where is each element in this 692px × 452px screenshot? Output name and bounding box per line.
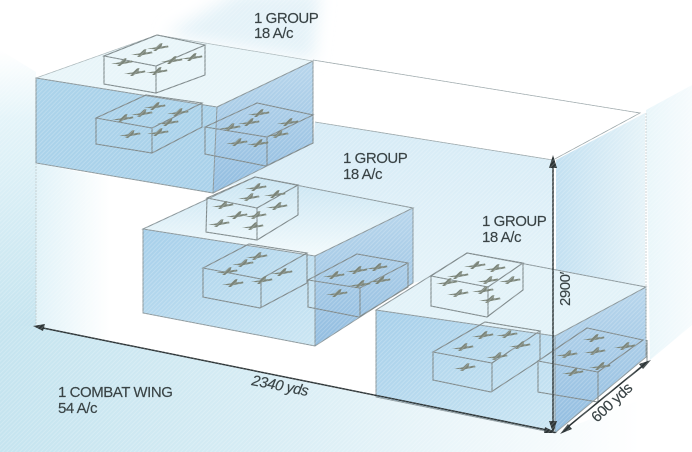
label: 2900 feet: 2900′: [557, 271, 574, 306]
label: top group: 18 A/c: [254, 25, 294, 42]
right wall: [556, 113, 645, 433]
arrow: wing height 2900 feet: [549, 155, 557, 433]
group 3 formation: [376, 253, 647, 433]
group 2 upper cell: [206, 177, 298, 240]
label: 600 yds: 600 yds: [588, 380, 636, 426]
arrow: wing depth 600 yds: [560, 360, 651, 434]
group 1 box: [36, 35, 313, 193]
label: 2340 yds: 2340 yds: [249, 372, 311, 400]
top wash: [165, 0, 320, 60]
label: right group: 1 GROUP: [482, 213, 546, 230]
group 2 left cell: [203, 244, 307, 308]
group 1 left cell: [96, 95, 202, 153]
label: middle group: 1 GROUP: [343, 150, 407, 167]
label: combat wing: 54 A/c: [58, 400, 98, 417]
label: middle group: 18 A/c: [343, 166, 383, 183]
ground wash: [0, 326, 692, 452]
white front plane edge fade: [36, 163, 110, 342]
group 2 formation: [143, 177, 413, 346]
group 2 right cell: [308, 254, 408, 317]
group 2 box: [143, 177, 413, 346]
group 1 upper cell: [104, 35, 205, 93]
group 1 right cell: [205, 103, 313, 166]
label: right group: 18 A/c: [482, 229, 522, 246]
group 3 right cell: [538, 328, 647, 402]
group 3 box: [376, 253, 646, 433]
back wall: [222, 122, 553, 345]
group 3 upper cell: [431, 253, 523, 317]
arrow: wing length 2340 yds: [33, 324, 557, 433]
outer wing envelope lines: [36, 60, 646, 345]
label: combat wing: 1 COMBAT WING: [58, 384, 172, 401]
left wash: [0, 50, 36, 326]
group 3 left cell: [433, 322, 540, 392]
group 1 formation: [36, 35, 313, 193]
label: top group: 1 GROUP: [254, 10, 318, 27]
right outer wash: [646, 85, 692, 360]
